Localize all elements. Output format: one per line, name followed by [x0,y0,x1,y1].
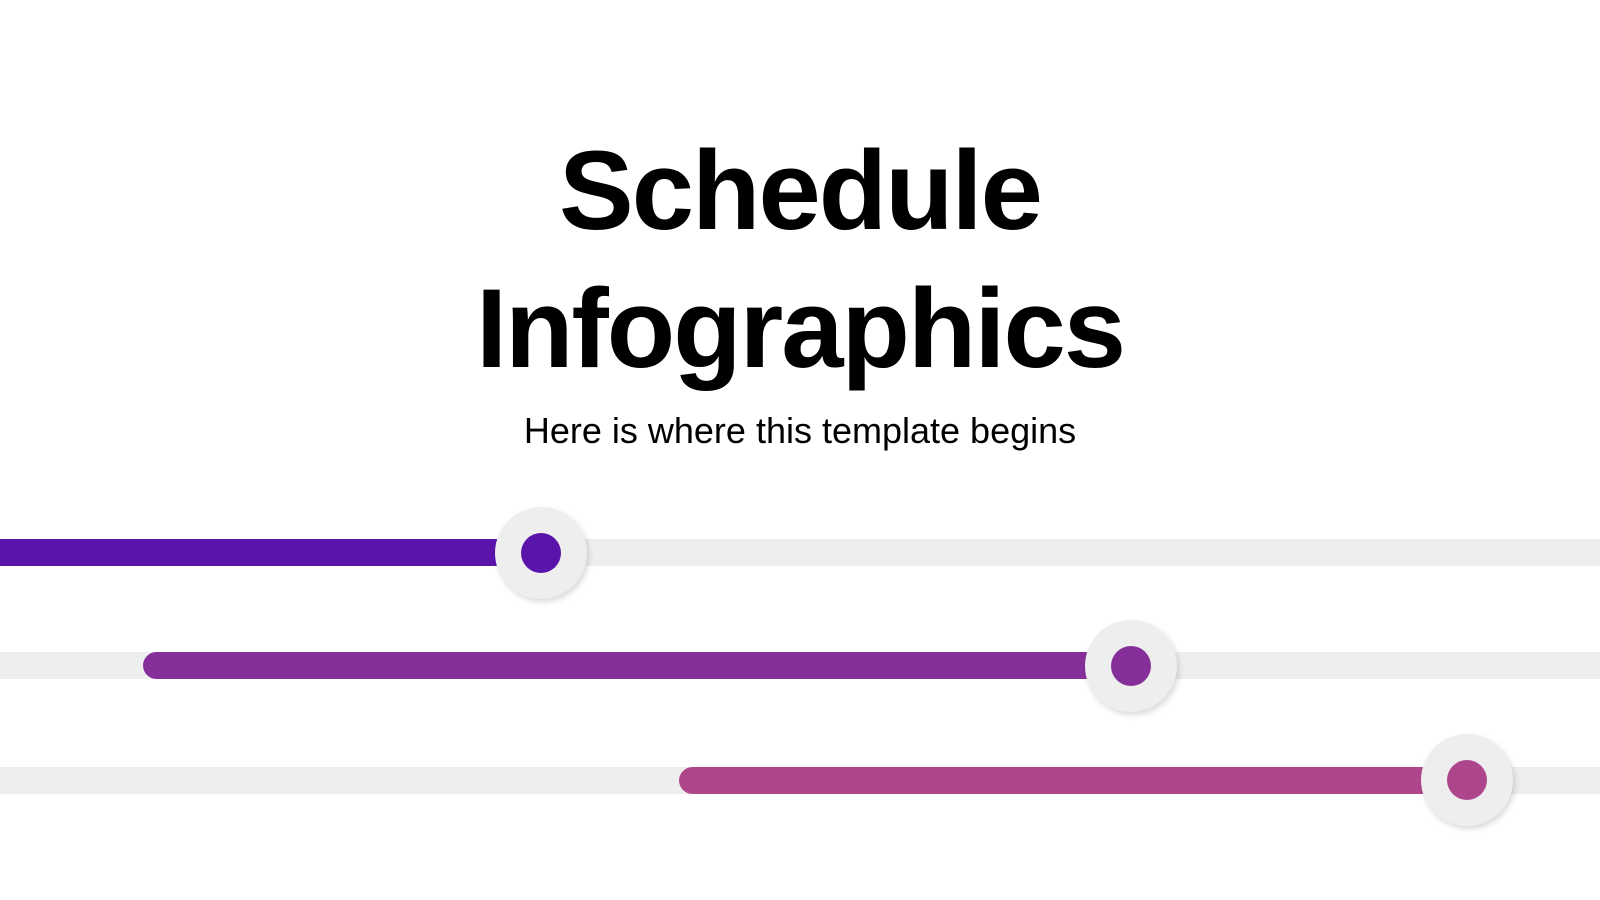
subtitle: Here is where this template begins [524,410,1076,451]
knob 2 [1085,620,1177,712]
title [476,128,1124,391]
knob 3 [1421,734,1513,826]
title: Infographics [476,266,1124,391]
slider 1 [0,507,1600,604]
knob 1 [495,507,587,599]
slider 3 [0,734,1600,831]
title: Schedule [559,128,1041,253]
slider 2 [0,620,1600,717]
